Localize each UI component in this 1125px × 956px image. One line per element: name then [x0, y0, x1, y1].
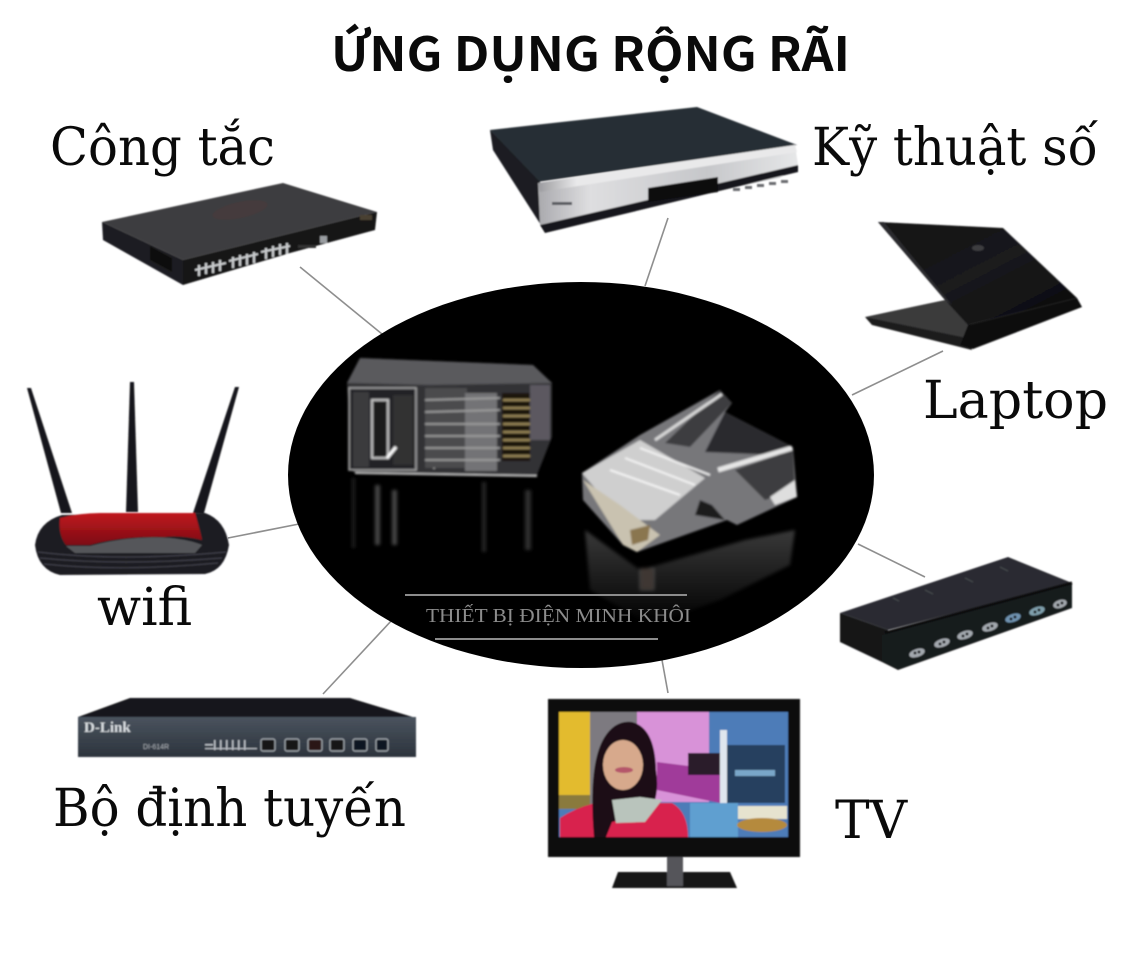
icon: D-Link router [78, 698, 416, 757]
label: Công tắc: Công tắc [50, 118, 275, 178]
icon: television [548, 699, 800, 888]
icon: network switch [102, 183, 377, 285]
right plug reflection [585, 530, 795, 625]
title: ỨNG DỤNG RỘNG RÃI [331, 16, 850, 85]
central panel: black ellipse with RJ45 plugs [288, 282, 874, 668]
icon: D-Link router: DI-614R [143, 744, 169, 751]
label: Kỹ thuật số: Kỹ thuật số [812, 118, 1098, 178]
label: wifi: wifi [97, 578, 192, 638]
TV screen [559, 712, 788, 837]
woman [560, 803, 688, 837]
icon: USB hub [840, 557, 1072, 670]
D-Link logo: D-Link [84, 720, 131, 736]
label: Bộ định tuyến: Bộ định tuyến [53, 779, 406, 839]
connector lines [228, 218, 943, 694]
icon: right RJ45 plug [582, 390, 797, 552]
icon: left RJ45 plug [347, 358, 552, 476]
icon: laptop [865, 222, 1082, 350]
left plug reflection [352, 478, 531, 552]
label: Laptop: Laptop [923, 371, 1108, 431]
icon: digital set-top box [490, 107, 798, 233]
icon: wifi router [27, 382, 239, 575]
watermark: THIẾT BỊ ĐIỆN MINH KHÔI [426, 603, 691, 627]
label: TV: TV [835, 791, 908, 851]
